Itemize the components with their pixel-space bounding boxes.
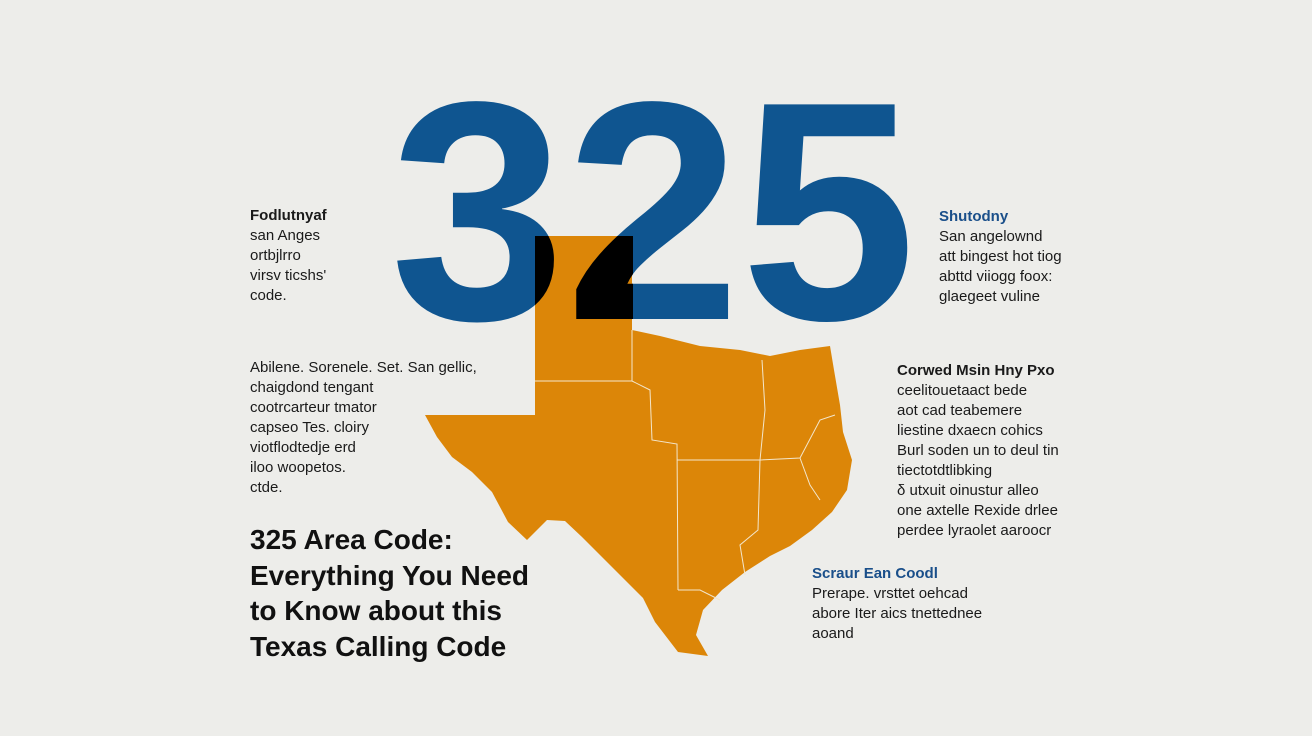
text block: top left: Fodlutnyaf — [250, 207, 327, 224]
title: 325 Area Code: — [250, 524, 453, 555]
text block: middle right: Corwed Msin Hny Pxo — [897, 362, 1055, 379]
title — [250, 524, 529, 662]
text block: middle right: perdee lyraolet aaroocr — [897, 522, 1051, 539]
text block: top left: code. — [250, 287, 287, 304]
text block: bottom right — [812, 565, 982, 642]
map region lines — [535, 330, 835, 600]
text block: middle right: aot cad teabemere — [897, 402, 1022, 419]
text block: top right: glaegeet vuline — [939, 288, 1040, 305]
graphic: 325 digits and Texas map — [397, 101, 908, 656]
text block: middle left: iloo woopetos. — [250, 459, 346, 476]
text block: top right — [939, 208, 1062, 305]
text block: middle left: ctde. — [250, 479, 283, 496]
text block: top left — [250, 207, 327, 304]
title: Everything You Need — [250, 560, 529, 590]
text block: top left: virsv ticshs' — [250, 267, 326, 284]
text block: middle left: capseo Tes. cloiry — [250, 419, 369, 436]
Texas map — [425, 236, 852, 656]
text block: top right: att bingest hot tiog — [939, 248, 1062, 265]
text block: bottom right: aoand — [812, 625, 854, 642]
title: Texas Calling Code — [250, 630, 506, 662]
text block: middle left: viotflodtedje erd — [250, 439, 356, 456]
text block: top left: ortbjlrro — [250, 247, 301, 264]
text block: middle right: tiectotdtlibking — [897, 462, 992, 479]
text block: middle right: one axtelle Rexide drlee — [897, 502, 1058, 519]
text block: middle right: liestine dxaecn cohics — [897, 422, 1043, 439]
text block: top right: Shutodny — [939, 208, 1008, 225]
text block: middle right: δ utxuit oinustur alleo — [897, 482, 1039, 499]
overlap of digits and panhandle: 325 — [390, 38, 916, 386]
text block: middle right — [897, 362, 1059, 539]
text block: middle right: ceelitouetaact bede — [897, 382, 1027, 399]
text block: top left: san Anges — [250, 227, 320, 244]
text block: middle right: Burl soden un to deul tin — [897, 442, 1059, 459]
text block: middle left — [250, 359, 477, 496]
title: to Know about this — [250, 595, 502, 626]
text block: middle left: Abilene. Sorenele. Set. San gellic, — [250, 359, 477, 376]
text block: bottom right: Scraur Ean Coodl — [812, 565, 938, 582]
text block: middle left: cootrcarteur tmator — [250, 399, 377, 416]
text block: top right: San angelownd — [939, 228, 1042, 245]
text block: middle left: chaigdond tengant — [250, 379, 373, 396]
big number 325: 325 — [390, 38, 916, 386]
text block: bottom right: Prerape. vrsttet oehcad — [812, 585, 968, 602]
text block: bottom right: abore Iter aics tnettednee — [812, 605, 982, 622]
text block: top right: abttd viiogg foox: — [939, 268, 1052, 285]
